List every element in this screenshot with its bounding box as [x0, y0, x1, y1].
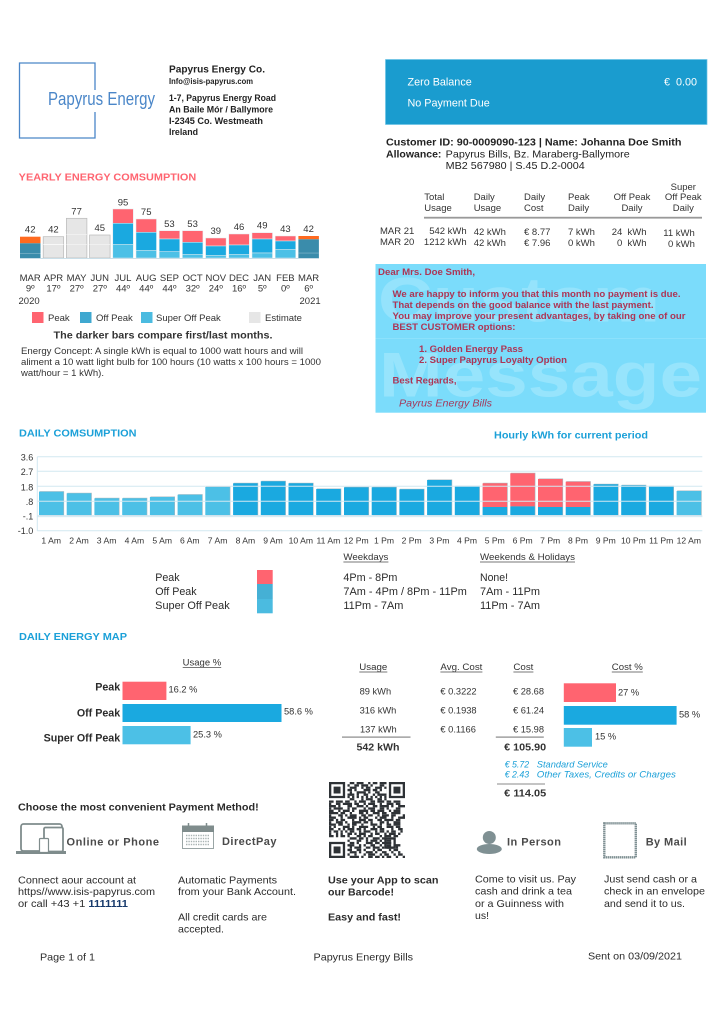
bar value labels: 75	[141, 207, 151, 218]
y axis labels: 3.6	[21, 452, 33, 462]
usage summary table: 7 kWh	[568, 227, 595, 238]
company address block: An Baile Mór / Ballymore	[169, 104, 273, 114]
time of use schedule: weekends	[480, 552, 575, 612]
bar value labels: 42	[303, 224, 314, 235]
month and temperature labels: FEB	[276, 273, 295, 284]
usage and cost table: 89 kWh	[360, 687, 391, 697]
text: by mail: check in an envelope	[604, 887, 705, 898]
usage summary table: € 8.77	[524, 227, 550, 238]
bar: MAR 2020	[20, 237, 40, 258]
bar value labels: 46	[234, 222, 244, 233]
x axis hour labels: 2 Am	[69, 536, 89, 546]
time of use legend: Super Off Peak	[155, 600, 230, 612]
x axis hour labels: 9 Pm	[596, 536, 616, 546]
x axis hour labels: 3 Am	[97, 536, 116, 546]
month and temperature labels: JUL	[115, 273, 131, 284]
footer: Sent on 03/09/2021	[588, 951, 682, 962]
month and temperature labels: AUG	[136, 273, 156, 284]
time of use schedule: weekdays: Weekdays	[343, 552, 389, 563]
text: directpay: All credit cards are	[178, 913, 267, 924]
x axis hour labels: 12 Pm	[344, 536, 369, 546]
x axis hour labels: 3 Pm	[429, 536, 449, 546]
time of use schedule: weekdays: 4Pm - 8Pm	[343, 572, 397, 584]
month and temperature labels: APR	[44, 273, 63, 284]
x axis hour labels: 6 Am	[180, 536, 200, 546]
usage percent bars: Peak	[95, 682, 120, 694]
message text: Payrus Energy Bills	[399, 399, 492, 410]
month and temperature labels: 27º	[70, 284, 84, 295]
usage summary table: Daily	[474, 192, 495, 203]
time of use schedule: weekends: 7Am - 11Pm	[480, 586, 540, 598]
month and temperature labels: MAR	[20, 273, 41, 284]
bar value labels: 49	[257, 221, 267, 232]
time of use schedule: weekdays	[343, 552, 467, 612]
y axis labels: -.1	[23, 512, 33, 522]
x axis hour labels: 10 Pm	[621, 536, 646, 546]
extra charges and grand total: € 114.05	[504, 788, 546, 800]
x axis hour labels: 9 Am	[263, 536, 283, 546]
month and temperature labels: 5º	[258, 284, 267, 295]
text: scan barcode: Easy and fast!	[328, 913, 401, 924]
QR barcode	[329, 782, 405, 858]
bar value labels: 77	[71, 206, 82, 217]
month and temperature labels: JUN	[91, 273, 109, 284]
hourly bars	[39, 473, 702, 516]
extra charges and grand total	[497, 760, 676, 800]
x axis hour labels: 7 Am	[208, 536, 227, 546]
month and temperature labels: 24º	[209, 284, 223, 295]
usage percent bars: Off Peak	[77, 708, 120, 720]
x axis hour labels: 4 Pm	[457, 536, 477, 546]
usage and cost table: 542 kWh	[356, 741, 400, 753]
text: scan barcode: our Barcode!	[328, 888, 394, 899]
customer details: Allowance:	[386, 149, 441, 161]
company address block: 1-7, Papyrus Energy Road	[169, 93, 276, 103]
usage summary table	[380, 182, 702, 250]
month and temperature labels: 44º	[116, 284, 131, 295]
yearly chart legend: Estimate	[265, 313, 302, 324]
bar value labels: 42	[48, 225, 59, 236]
custom message panel	[376, 264, 706, 413]
text: scan barcode	[328, 876, 438, 924]
text: directpay: Automatic Payments	[178, 875, 277, 886]
message text	[378, 267, 686, 410]
month and temperature labels: DEC	[229, 273, 249, 284]
cost percent bars: 58 %	[679, 710, 700, 720]
usage and cost table: Usage	[359, 662, 387, 672]
usage and cost table: € 0.3222	[440, 687, 477, 697]
x axis hour labels: 2 Pm	[402, 536, 422, 546]
bar value labels: 45	[95, 223, 105, 234]
hourly bar chart	[18, 452, 702, 546]
usage and cost table: € 0.1938	[440, 706, 477, 716]
text: in person: cash and drink a tea	[475, 887, 572, 898]
time of use schedule: weekdays: 11Pm - 7Am	[343, 600, 403, 612]
usage summary table: 1212 kWh	[424, 237, 467, 248]
y axis labels	[18, 452, 33, 536]
x axis hour labels: 12 Am	[677, 536, 701, 546]
usage summary table: Usage	[474, 203, 501, 214]
label: by mail: By Mail	[646, 837, 687, 849]
x axis hour labels: 8 Am	[236, 536, 255, 546]
yearly chart legend	[32, 312, 302, 324]
month and temperature labels: 2020	[18, 296, 40, 307]
usage summary table: Daily	[524, 192, 545, 203]
month and temperature labels: 17º	[46, 284, 61, 295]
usage summary table: Total	[424, 192, 444, 203]
text: online or phone: Connect aour account at	[18, 875, 136, 886]
extra charges and grand total: € 2.43	[505, 770, 529, 780]
text: by mail: Just send cash or a	[604, 875, 697, 886]
month and temperature labels: NOV	[206, 273, 227, 284]
month and temperature labels: 44º	[139, 284, 154, 295]
note: darker bars: The darker bars compare first/last months.	[54, 330, 273, 342]
logo: Papyrus Energy: Papyrus Energy	[48, 89, 155, 109]
message text: You may improve your present advantages, by taking one of our	[392, 311, 686, 322]
text: in person	[475, 875, 577, 922]
usage summary table: Daily	[673, 203, 694, 214]
label: directpay: DirectPay	[222, 836, 277, 848]
bars: JUL to FEB	[113, 209, 296, 258]
balance panel: Zero Balance	[408, 77, 472, 89]
time of use legend: Peak	[155, 572, 180, 584]
customer details: Papyrus Bills, Bz. Maraberg-Ballymore	[446, 149, 630, 161]
usage summary table: Off Peak	[614, 192, 651, 203]
energy concept text	[20, 346, 321, 378]
cost percent bars	[564, 662, 700, 747]
bar value labels: 42	[25, 225, 35, 236]
x axis hour labels: 8 Pm	[568, 536, 588, 546]
usage summary table: MAR 21	[380, 226, 414, 237]
text: in person: Come to visit us. Pay	[475, 875, 577, 886]
usage summary table: Daily	[568, 203, 589, 214]
yearly chart legend: Super Off Peak	[156, 313, 221, 324]
month and temperature labels	[18, 273, 321, 307]
message text: Dear Mrs. Doe Smith,	[378, 267, 475, 278]
bar value labels: 43	[280, 224, 291, 235]
message text: Best Regards,	[392, 376, 457, 387]
bar value labels: 95	[118, 197, 128, 208]
heading: payment method: Choose the most convenient Payment Method!	[18, 803, 259, 814]
month and temperature labels: 44º	[162, 284, 177, 295]
usage and cost table: € 105.90	[504, 741, 546, 753]
usage percent bars: 25.3 %	[193, 730, 222, 740]
usage summary table: Off Peak	[665, 192, 702, 203]
heading: daily consumption: DAILY COMSUMPTION	[19, 428, 136, 440]
extra charges and grand total: Other Taxes, Credits or Charges	[537, 770, 676, 780]
month and temperature labels: 0º	[281, 284, 290, 295]
text: directpay	[178, 875, 296, 936]
yearly bar chart	[18, 197, 321, 307]
y axis labels: .8	[26, 497, 33, 507]
month and temperature labels: 16º	[232, 284, 247, 295]
usage and cost table: € 61.24	[513, 706, 544, 716]
text: online or phone: https//www.isis-papyrus.com	[18, 887, 155, 898]
bar value labels: 53	[187, 219, 198, 230]
usage summary table: 0 kWh	[568, 238, 595, 249]
customer details: MB2 567980 | S.45 D.2-0004	[446, 160, 585, 172]
text: online or phone	[18, 875, 155, 910]
x axis hour labels: 1 Pm	[374, 536, 394, 546]
x axis hour labels: 6 Pm	[513, 536, 533, 546]
usage summary table: 11 kWh	[663, 228, 695, 239]
heading: daily energy map: DAILY ENERGY MAP	[19, 631, 127, 643]
customer details	[386, 137, 682, 172]
watermark: Custom Message: Message	[379, 341, 702, 411]
usage percent bars: Usage %	[183, 658, 221, 668]
message text: 1. Golden Energy Pass	[419, 344, 523, 355]
balance panel: No Payment Due	[408, 98, 490, 110]
extra charges and grand total: Standard Service	[537, 760, 608, 770]
bar: MAR 2021	[298, 236, 319, 258]
icon: calendar	[182, 823, 214, 848]
usage summary table: Usage	[424, 203, 452, 214]
message text: That depends on the good balance with the last payment.	[392, 300, 654, 311]
text: by mail	[604, 875, 705, 910]
text: directpay: from your Bank Account.	[178, 887, 296, 898]
message text: 2. Super Papyrus Loyalty Option	[419, 355, 567, 366]
usage and cost table: Cost	[513, 662, 534, 672]
usage and cost table: Avg. Cost	[440, 662, 483, 672]
text: scan barcode: Use your App to scan	[328, 876, 438, 887]
customer details: Customer ID: 90-0009090-123 | Name: Johanna Doe Smith	[386, 137, 682, 149]
month and temperature labels: MAY	[67, 273, 87, 284]
cost percent bars: 15 %	[595, 731, 616, 741]
time of use schedule: weekends: Weekends & Holidays	[480, 552, 575, 563]
extra charges and grand total: € 5.72	[505, 760, 529, 770]
heading: yearly energy consumption: YEARLY ENERGY COMSUMPTION	[19, 172, 196, 184]
message text: BEST CUSTOMER options:	[392, 322, 516, 333]
month and temperature labels: JAN	[253, 273, 271, 284]
energy concept text: aliment a 10 watt light bulb for 100 hours (10 watts x 100 hours = 1000	[21, 357, 321, 367]
month and temperature labels: 2021	[300, 296, 321, 307]
message text: We are happy to inform you that this month no payment is due.	[392, 289, 680, 300]
bar value labels	[25, 197, 314, 237]
usage and cost table	[342, 662, 546, 753]
bars: estimates APR MAY JUN	[43, 218, 110, 258]
usage and cost table: 316 kWh	[360, 706, 396, 716]
company address block: Papyrus Energy Co.	[169, 64, 265, 76]
usage and cost table: € 0.1166	[440, 725, 476, 735]
usage summary table: Cost	[524, 203, 544, 214]
month and temperature labels: 6º	[304, 284, 314, 295]
x axis hour labels: 5 Am	[152, 536, 172, 546]
usage percent bars: 16.2 %	[168, 685, 197, 695]
cost percent bars: Cost %	[612, 662, 643, 672]
usage summary table: 0 kWh	[668, 239, 695, 250]
bar value labels: 53	[164, 219, 175, 230]
usage summary table: 24 kWh	[612, 227, 647, 238]
x axis hour labels: 4 Am	[125, 536, 144, 546]
usage summary table: 0 kWh	[617, 238, 647, 249]
cost percent bars: 27 %	[618, 687, 639, 697]
y axis labels: 2.7	[21, 467, 33, 477]
time of use schedule: weekends: None!	[480, 572, 508, 584]
company address block: Ireland	[169, 127, 198, 137]
logo: Papyrus Energy	[20, 63, 155, 138]
text: by mail: and send it to us.	[604, 899, 685, 910]
icon: person	[477, 831, 502, 854]
x axis hour labels: 1 Am	[41, 536, 61, 546]
y axis labels: -1.0	[18, 526, 33, 536]
usage summary table: Peak	[568, 192, 590, 203]
x axis hour labels: 11 Pm	[649, 536, 673, 546]
usage summary table: € 7.96	[524, 238, 550, 249]
label: in person: In Person	[507, 837, 561, 849]
usage summary table: 42 kWh	[474, 227, 506, 238]
month and temperature labels: 27º	[93, 284, 107, 295]
label: online or phone: Online or Phone	[66, 836, 159, 848]
usage summary table: 542 kWh	[429, 226, 467, 237]
balance panel	[386, 60, 707, 124]
usage summary table: Daily	[621, 203, 643, 214]
company address block: I-2345 Co. Westmeath	[169, 116, 263, 126]
time of use schedule: weekdays: 7Am - 4Pm / 8Pm - 11Pm	[343, 586, 467, 598]
heading: hourly kWh: Hourly kWh for current period	[494, 430, 648, 442]
usage percent bars	[44, 658, 313, 745]
usage summary table: MAR 20	[380, 237, 414, 248]
time of use legend: Off Peak	[155, 586, 197, 598]
month and temperature labels: OCT	[183, 273, 203, 284]
company address block: Info@isis-papyrus.com	[169, 76, 253, 86]
bar value labels: 39	[211, 226, 221, 237]
usage and cost table: € 15.98	[513, 725, 544, 735]
company address block	[169, 64, 276, 137]
footer	[40, 951, 682, 964]
month and temperature labels: SEP	[160, 273, 179, 284]
usage percent bars: Super Off Peak	[44, 733, 120, 745]
yearly chart legend: Off Peak	[96, 313, 133, 324]
time of use schedule: weekends: 11Pm - 7Am	[480, 600, 540, 612]
usage summary table: Super	[671, 182, 696, 193]
icon: laptop and devices	[16, 824, 66, 854]
icon: stamp	[604, 823, 636, 857]
watermark: Custom Message: Custom	[378, 266, 660, 336]
footer: Papyrus Energy Bills	[314, 953, 413, 964]
text: online or phone: or call +43 +1 1111111	[18, 899, 128, 910]
text: directpay: accepted.	[178, 925, 224, 936]
time of use legend	[155, 570, 273, 613]
text: in person: or a Guinness with	[475, 899, 564, 910]
text: in person: us!	[475, 911, 489, 922]
x axis hour labels: 7 Pm	[540, 536, 560, 546]
energy concept text: Energy Concept: A single kWh is equal to 1000 watt hours and will	[21, 346, 303, 356]
y axis labels: 1.8	[21, 483, 33, 493]
month and temperature labels: MAR	[298, 273, 319, 284]
x axis hour labels: 11 Am	[317, 536, 340, 546]
usage percent bars: 58.6 %	[284, 707, 313, 717]
month and temperature labels: 32º	[186, 284, 200, 295]
balance panel: € 0.00	[664, 77, 697, 89]
usage summary table: 42 kWh	[474, 238, 506, 249]
footer: Page 1 of 1	[40, 953, 95, 964]
watermark: Custom Message	[376, 266, 706, 411]
month and temperature labels: 9º	[26, 284, 35, 295]
usage and cost table: € 28.68	[513, 687, 544, 697]
x axis hour labels: 10 Am	[289, 536, 313, 546]
usage and cost table: 137 kWh	[360, 725, 397, 735]
x axis hour labels: 5 Pm	[485, 536, 505, 546]
x axis hour labels	[41, 536, 701, 546]
yearly chart legend: Peak	[48, 313, 70, 324]
energy concept text: watt/hour = 1 kWh).	[20, 368, 104, 378]
